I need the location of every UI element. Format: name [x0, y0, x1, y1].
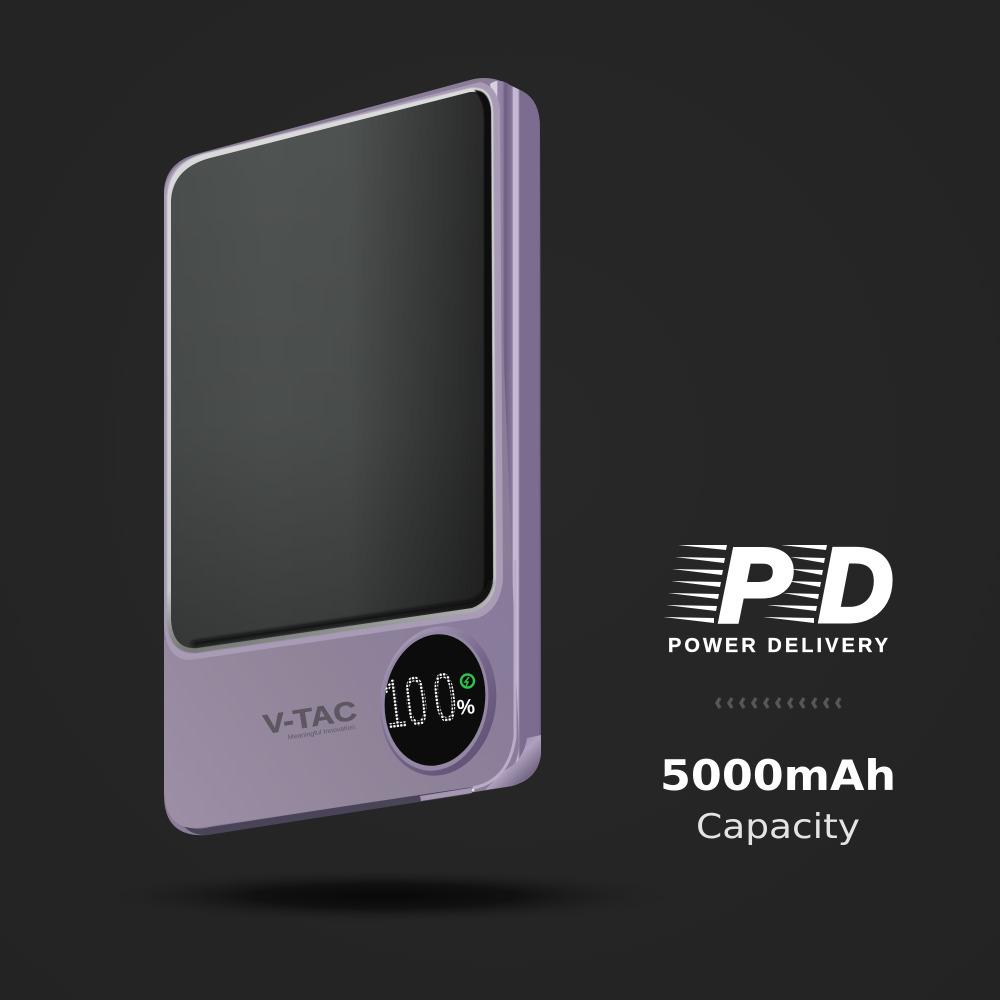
display screen — [376, 628, 494, 772]
percent sign: % — [456, 695, 476, 720]
reading 100: 100 — [379, 658, 461, 745]
capacity value: 5000mAh — [660, 751, 896, 800]
glass plate bezel — [164, 82, 503, 660]
bottom edge — [180, 787, 470, 835]
device side frame — [164, 78, 541, 835]
floor shadow — [95, 869, 675, 923]
lower body panel — [164, 560, 515, 828]
glass plate — [167, 88, 496, 653]
charging icon — [461, 674, 474, 688]
letter D: D — [819, 528, 893, 644]
letter P: P — [719, 528, 792, 644]
speed lines — [663, 545, 827, 623]
glass lower shadow — [192, 580, 490, 644]
pd logo — [663, 528, 893, 657]
power delivery label: POWER DELIVERY — [668, 635, 889, 657]
usb port — [420, 788, 472, 801]
chevron divider — [717, 698, 840, 708]
display — [370, 619, 506, 783]
capacity label: Capacity — [696, 807, 860, 847]
logo: V-TAC: V-TAC — [261, 696, 359, 740]
logo: V-TAC: Meaningful Innovation. — [287, 724, 358, 741]
display ring — [370, 619, 506, 783]
power bank device — [164, 78, 541, 835]
